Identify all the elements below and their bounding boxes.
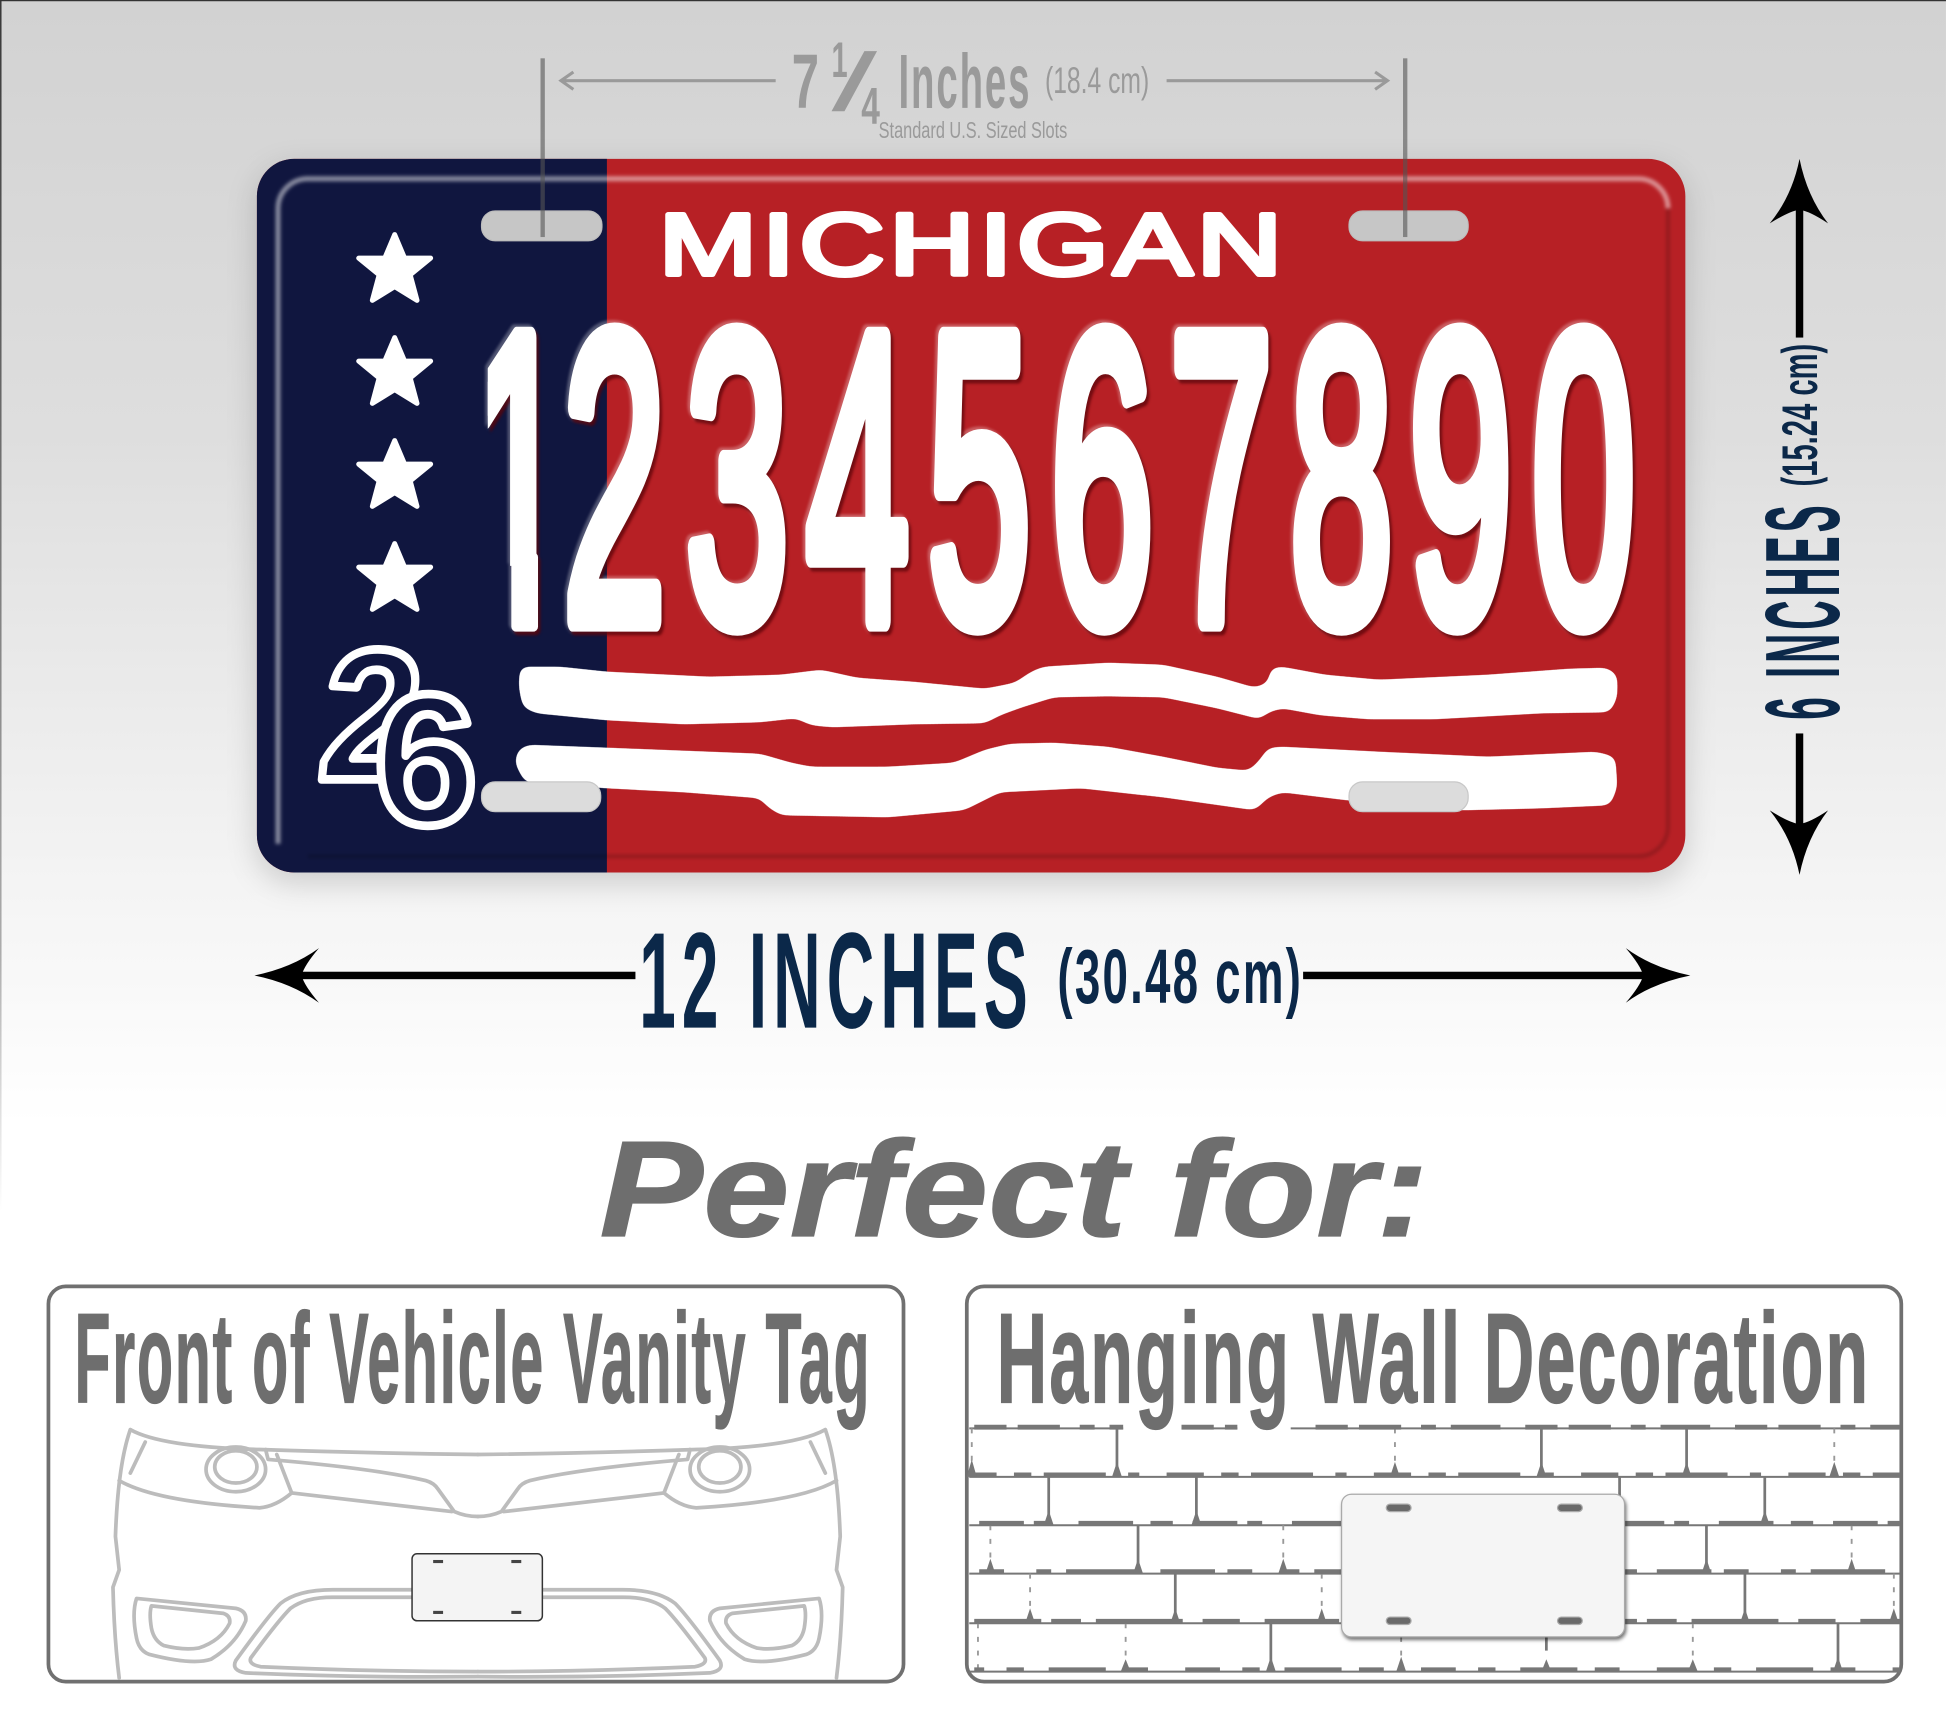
license plate (257, 159, 1685, 872)
slot spacing label: 7 (792, 39, 819, 125)
slot spacing label: Inches (899, 39, 1031, 125)
plate number: 4 (806, 250, 909, 708)
plate number: 3 (686, 250, 789, 708)
brick wall (967, 1427, 1900, 1672)
width dimension (254, 904, 1690, 1057)
panel frame (967, 1286, 1901, 1682)
width arrow right (1303, 948, 1690, 1003)
state name: MICHIGAN (659, 196, 1287, 293)
gray arrows (561, 72, 1388, 89)
width dimension: 12 INCHES (639, 904, 1034, 1057)
flag stripes (515, 663, 1617, 817)
slot spacing label: 1 (832, 32, 848, 88)
blank plate on wall (1342, 1494, 1625, 1637)
text: Front of Vehicle Vanity Tag (74, 1287, 871, 1430)
height dimension: 6 INCHES (1745, 501, 1862, 720)
height arrow top (1770, 159, 1828, 338)
plate number: 1 (469, 250, 571, 708)
plate number (484, 318, 1637, 641)
panel frame (48, 1286, 904, 1682)
slot spacing dimension (540, 32, 1407, 237)
extension lines (540, 58, 1407, 237)
height metric label: (15.24 cm) (1772, 344, 1828, 486)
slot spacing label: (18.4 cm) (1045, 59, 1149, 101)
stars (359, 235, 431, 609)
panel: front of vehicle (48, 1286, 904, 1682)
plate number: 5 (928, 250, 1031, 708)
heading: perfect for: Perfect for: (599, 1112, 1428, 1265)
year logo (312, 611, 477, 864)
panel: wall decoration (967, 1286, 1901, 1682)
mounting slots (482, 211, 1468, 812)
plate number: 7 (1170, 250, 1273, 708)
year logo: 6 (374, 656, 477, 864)
plate number: 2 (563, 250, 666, 708)
car line drawing (113, 1430, 843, 1678)
plate number: 6 (1051, 250, 1153, 708)
plate number: 0 (1532, 250, 1635, 708)
year logo: 2 (312, 611, 432, 819)
mini plate on car (412, 1554, 542, 1621)
embossed rim (278, 179, 1668, 856)
slot spacing label: 4 (861, 78, 880, 136)
width metric label: (30.48 cm) (1057, 934, 1303, 1020)
width arrow left (254, 948, 635, 1003)
slot spacing label (792, 32, 1149, 143)
height arrow bottom (1770, 733, 1828, 875)
slot spacing label: / (832, 37, 877, 128)
plate number: 8 (1290, 250, 1393, 708)
plate number: 9 (1409, 250, 1512, 708)
plate body (257, 159, 1685, 872)
slot spacing label: Standard U.S. Sized Slots (879, 117, 1067, 143)
